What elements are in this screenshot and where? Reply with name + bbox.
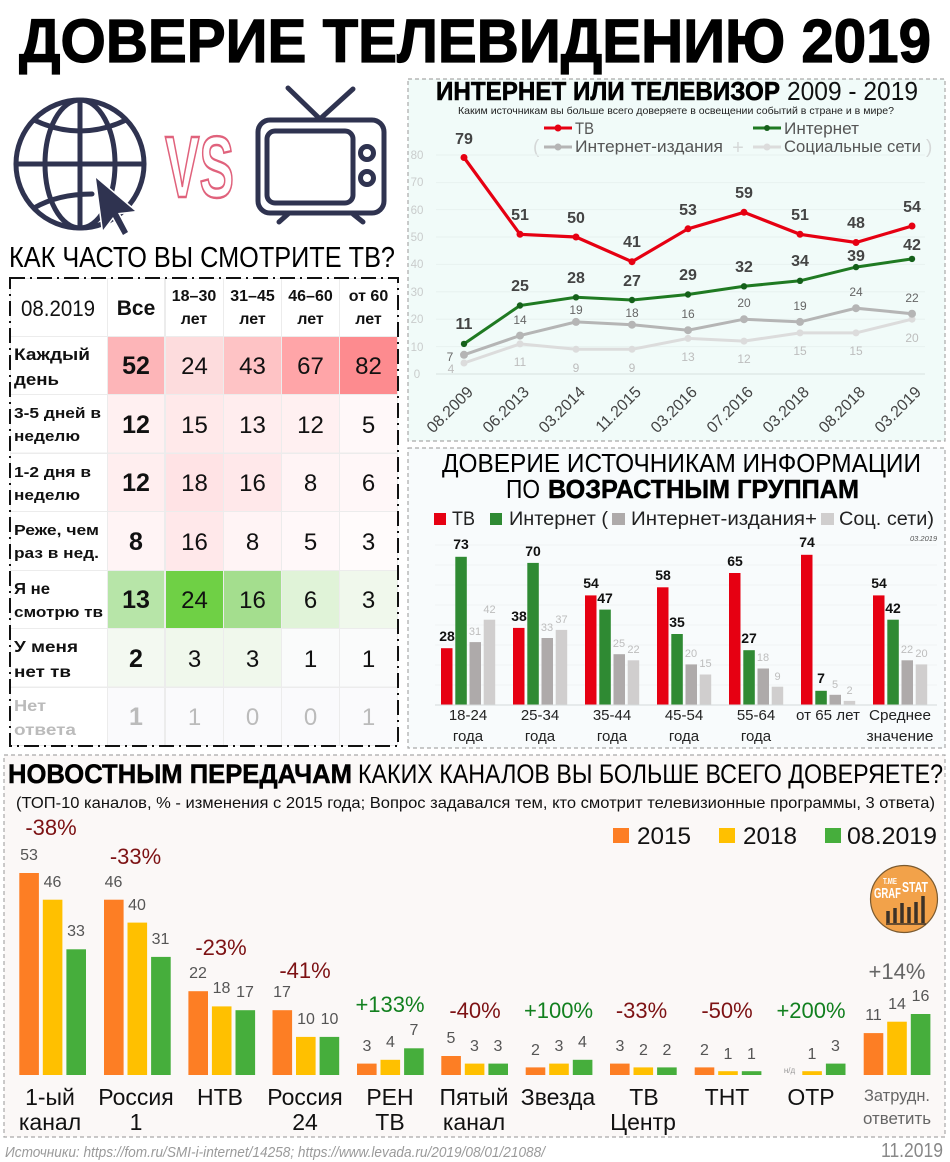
channels subtitle: (ТОП-10 каналов, % - изменения с 2015 года; Вопрос задавался тем, кто смотрит телевизионные программы, 3 ответа) (16, 795, 935, 812)
channels legend: 08.2019 (847, 823, 937, 850)
panel: internet or tv line chart (408, 76, 945, 441)
row: do not watch: 24 (181, 587, 208, 614)
y axis labels: 20 (411, 314, 423, 326)
channel: zvezda: Звезда (521, 1084, 595, 1110)
x axis dates: 03.2016 (648, 384, 701, 437)
group: 65 and over: 5 (832, 679, 838, 691)
row: no tv: У меня (14, 639, 78, 656)
channel: first channel: 53 (20, 847, 38, 864)
line chart heading: Каким источникам вы больше всего доверяете в освещении событий в стране и в мире? (458, 105, 894, 117)
logo: t.me grafstat (870, 866, 938, 932)
channel: otr: 3 (831, 1038, 840, 1055)
group: 18-24: 18-24 (449, 707, 487, 724)
y axis labels: 70 (411, 177, 423, 189)
channel: first channel: 1-ый (25, 1084, 75, 1110)
row: no answer: Нет (14, 698, 46, 715)
channel: first channel: 33 (67, 923, 85, 940)
line: television: 51 (791, 207, 809, 224)
channel: ren tv: 7 (410, 1022, 419, 1039)
row: no answer (14, 698, 375, 739)
row: no tv (14, 639, 375, 681)
group: 55-64: 27 (741, 630, 757, 646)
line: television: 54 (903, 199, 921, 216)
row: 1-2 days: 16 (239, 470, 266, 497)
heading: how often: КАК ЧАСТО ВЫ СМОТРИТЕ ТВ? (9, 242, 395, 274)
group: 45-54: 45-54 (665, 707, 703, 724)
row: less than weekly: раз в нед. (14, 546, 99, 562)
line: internet publications: 19 (793, 299, 807, 313)
age chart heading (442, 448, 921, 504)
row: less than weekly: 5 (304, 529, 317, 556)
group: 55-64 (727, 553, 783, 745)
group: 45-54: 15 (699, 658, 712, 670)
table header: от 60 (349, 288, 388, 305)
line: social networks: 20 (905, 331, 919, 345)
row: no tv: 2 (129, 645, 143, 673)
channel: ren tv: 4 (386, 1034, 395, 1051)
line: internet: 32 (735, 259, 753, 276)
row: every day: день (14, 371, 59, 389)
channel: ntv (188, 935, 255, 1110)
channel: fifth channel: 5 (447, 1030, 456, 1047)
channel: ren tv: 3 (363, 1038, 372, 1055)
channel: hard to answer: 11 (865, 1007, 882, 1024)
line chart legend: Интернет (784, 119, 859, 138)
line: internet: 29 (679, 267, 697, 284)
group: average: 42 (885, 600, 901, 616)
row: 1-2 days: 1-2 дня в (14, 465, 91, 481)
line: internet: 34 (791, 253, 809, 270)
line chart heading: ИНТЕРНЕТ ИЛИ ТЕЛЕВИЗОР (436, 76, 780, 106)
line: television: 41 (623, 234, 641, 251)
panel: trust by age group (408, 448, 945, 748)
channel: tnt: 1 (747, 1046, 756, 1063)
line: social networks: 15 (793, 344, 807, 358)
group: 18-24 (439, 536, 496, 745)
group: 55-64: 65 (727, 553, 743, 569)
channel: zvezda: 3 (555, 1038, 564, 1055)
channels legend: 2015 (637, 823, 691, 850)
icon: television (258, 88, 384, 222)
group: 65 and over: 7 (817, 670, 825, 686)
x axis dates: 03.2018 (760, 384, 813, 437)
age chart heading: ПО (506, 474, 540, 504)
channel: ren tv: +133% (355, 992, 425, 1017)
channel: first channel: канал (19, 1109, 81, 1135)
line: internet publications: 14 (513, 313, 527, 327)
channel: otr: н/д (784, 1066, 795, 1075)
channel: russia 24: -41% (279, 958, 331, 983)
line: internet: 27 (623, 273, 641, 290)
table header (21, 288, 388, 328)
row: do not watch: 16 (239, 587, 266, 614)
y axis labels: 10 (411, 342, 423, 354)
channel: first channel: 46 (44, 874, 62, 891)
channel: tv centre: 2 (639, 1042, 648, 1059)
line: internet: 11 (456, 316, 473, 333)
channel: ntv: -23% (195, 935, 247, 960)
group: 35-44: 54 (583, 575, 599, 591)
table header: 31–45 (230, 288, 275, 305)
line chart legend: ( (533, 137, 540, 158)
group: 35-44: 35-44 (593, 707, 631, 724)
panel: news channels trust (4, 755, 945, 1137)
group: average: 20 (915, 648, 928, 660)
date stamp: 11.2019 (881, 1140, 943, 1162)
line chart legend: ТВ (575, 119, 594, 138)
group: 25-34: 25-34 (521, 707, 559, 724)
row: 3-5 days: 12 (297, 412, 324, 439)
group: 45-54: 58 (655, 567, 671, 583)
channel: tnt: 1 (724, 1046, 733, 1063)
group: 65 and over: 2 (846, 685, 853, 697)
line chart legend: Социальные сети (784, 137, 921, 156)
logo: t.me grafstat: STAT (902, 879, 928, 896)
channel: zvezda (521, 998, 595, 1110)
channel: otr: ОТР (787, 1084, 835, 1110)
row: no answer: 1 (188, 704, 201, 731)
row: 3-5 days: 12 (122, 411, 150, 439)
row: every day: 43 (239, 353, 266, 380)
channel: russia 1: 31 (152, 931, 170, 948)
line: social networks: 12 (737, 352, 751, 366)
table header: 08.2019 (21, 296, 95, 321)
line: social networks: 4 (448, 362, 455, 376)
row: every day: 52 (122, 352, 150, 380)
channel: ren tv: РЕН (366, 1084, 414, 1110)
channel: tnt (695, 998, 761, 1110)
channel: russia 24 (267, 958, 343, 1135)
group: 65 and over (796, 534, 860, 724)
x axis dates: 06.2013 (480, 384, 533, 437)
row: 3-5 days: 15 (181, 412, 208, 439)
channel: russia 24: 10 (297, 1011, 315, 1028)
line chart heading (436, 76, 918, 117)
channel: ntv: 22 (189, 965, 207, 982)
group: 45-54: 35 (669, 614, 685, 630)
channel: first channel (19, 815, 86, 1135)
group: 18-24: 31 (469, 626, 481, 638)
channel: first channel: -38% (25, 815, 77, 840)
x axis dates: 08.2009 (424, 384, 477, 437)
channel: russia 24: 24 (292, 1109, 318, 1135)
channel: hard to answer: Затрудн. (864, 1086, 930, 1105)
row: 3-5 days: неделю (14, 429, 80, 445)
line: social networks: 9 (573, 361, 580, 375)
sources footer: Источники: https://fom.ru/SMI-i-internet/14258; https://www.levada.ru/2019/08/01/21088/ (5, 1145, 547, 1161)
age chart legend: ТВ (452, 509, 475, 530)
group: 25-34: 70 (525, 543, 541, 559)
y axis labels: 40 (411, 259, 423, 271)
group: average: 54 (871, 575, 887, 591)
channels heading: НОВОСТНЫМ ПЕРЕДАЧАМ (8, 759, 352, 789)
group: 55-64: года (741, 728, 772, 745)
group: 25-34: 37 (555, 614, 568, 626)
channel: russia 1: 1 (130, 1109, 142, 1135)
channel: russia 1: Россия (98, 1084, 174, 1110)
row: less than weekly: 16 (181, 529, 208, 556)
line: internet publications: 24 (849, 285, 863, 299)
group: average: Среднее (869, 707, 931, 724)
row: no tv: 3 (246, 646, 259, 673)
group: 18-24: 42 (483, 604, 496, 616)
table header: 46–60 (288, 288, 333, 305)
group: 65 and over: 74 (799, 534, 815, 550)
survey date: 03.2019 (910, 534, 938, 543)
table: viewing frequency (10, 278, 398, 746)
channel: tnt: ТНТ (705, 1084, 749, 1110)
age chart legend: Интернет ( (509, 509, 609, 530)
line: internet: 42 (903, 237, 921, 254)
group: 35-44: 22 (627, 644, 640, 656)
channel: russia 24: Россия (267, 1084, 343, 1110)
channel: hard to answer: ответить (863, 1109, 931, 1128)
line: television: 59 (735, 185, 753, 202)
row: no answer: ответа (14, 722, 76, 739)
row: 1-2 days: 8 (304, 470, 317, 497)
row: no answer: 1 (362, 704, 375, 731)
group: average: 22 (901, 644, 913, 656)
channel: fifth channel: -40% (449, 998, 501, 1023)
row: 1-2 days: неделю (14, 488, 80, 504)
row: do not watch: 13 (122, 586, 150, 614)
x axis dates: 03.2014 (536, 384, 589, 437)
channel: tv centre: -33% (616, 998, 667, 1023)
row: less than weekly: 3 (362, 529, 375, 556)
line: social networks (448, 316, 919, 376)
channels legend (613, 823, 937, 850)
line: internet (456, 237, 921, 347)
line: television (455, 131, 921, 265)
channel: russia 1: 40 (128, 897, 146, 914)
logo: t.me grafstat: GRAF (874, 885, 901, 902)
row: every day: 67 (297, 353, 324, 380)
line: social networks: 9 (629, 361, 636, 375)
line: internet publications (447, 285, 919, 364)
y axis labels (411, 150, 423, 381)
group: 55-64: 55-64 (737, 707, 775, 724)
channel: hard to answer: 14 (888, 996, 906, 1013)
icon: VS: VS (165, 119, 234, 216)
channel: fifth channel (440, 998, 508, 1135)
line: social networks: 11 (514, 355, 527, 369)
row: 3-5 days: 3-5 дней в (14, 406, 101, 422)
icon: globe with cursor (16, 100, 144, 235)
group: 18-24: года (453, 728, 484, 745)
y axis labels: 0 (414, 369, 420, 381)
table header: 18–30 (172, 288, 216, 305)
line: internet publications: 7 (447, 350, 454, 364)
line: television: 48 (847, 215, 865, 232)
x axis dates: 11.2015 (593, 384, 645, 436)
channel: fifth channel: канал (443, 1109, 505, 1135)
group: average (866, 575, 934, 745)
age chart legend: Интернет-издания+ (631, 509, 817, 530)
group: 18-24: 28 (439, 628, 455, 644)
line chart legend (533, 119, 932, 159)
row: 1-2 days (14, 465, 375, 504)
group: average: значение (866, 728, 934, 745)
y axis labels: 80 (411, 150, 423, 162)
row: no tv: 3 (188, 646, 201, 673)
group: 35-44: 47 (597, 590, 613, 606)
line: television: 79 (455, 131, 473, 148)
row: 3-5 days: 5 (362, 412, 375, 439)
x axis dates: 08.2018 (816, 384, 869, 437)
group: 65 and over: от 65 лет (796, 707, 860, 724)
row: no answer: 1 (129, 703, 143, 731)
row: every day: 82 (355, 353, 382, 380)
line: internet: 25 (511, 278, 529, 295)
channels heading (8, 759, 943, 789)
channel: fifth channel: Пятый (440, 1084, 508, 1110)
channel: hard to answer: 16 (912, 988, 930, 1005)
channel: tv centre: 2 (663, 1042, 672, 1059)
channel: russia 1: 46 (105, 874, 122, 891)
channel: hard to answer (863, 959, 931, 1128)
row: less than weekly: 8 (129, 528, 143, 556)
group: 45-54: 20 (685, 648, 697, 660)
channel: russia 1: -33% (110, 844, 161, 869)
row: do not watch: 3 (362, 587, 375, 614)
line chart legend: ) (926, 137, 932, 158)
channel: hard to answer: +14% (869, 959, 925, 984)
table header: лет (355, 311, 382, 328)
channel: fifth channel: 3 (494, 1038, 503, 1055)
age chart heading: ВОЗРАСТНЫМ ГРУППАМ (548, 474, 859, 504)
channel: tnt: 2 (700, 1042, 709, 1059)
row: do not watch: Я не (14, 581, 50, 598)
channel: fifth channel: 3 (470, 1038, 479, 1055)
channel: ntv: НТВ (197, 1084, 243, 1110)
line: internet: 39 (847, 248, 865, 265)
row: 1-2 days: 6 (362, 470, 375, 497)
y axis labels: 30 (411, 287, 423, 299)
row: no tv: 1 (362, 646, 375, 673)
row: less than weekly: 8 (246, 529, 259, 556)
line: television: 53 (679, 202, 697, 219)
channels legend: 2018 (743, 823, 797, 850)
channel: tv centre: 3 (616, 1038, 625, 1055)
row: less than weekly (14, 523, 375, 562)
table header: лет (181, 311, 207, 328)
x axis dates (424, 384, 925, 437)
y axis labels: 60 (411, 205, 423, 217)
channel: zvezda: 4 (578, 1034, 587, 1051)
line: internet publications: 19 (569, 303, 583, 317)
row: 1-2 days: 18 (181, 470, 208, 497)
line chart legend: Интернет-издания (575, 137, 723, 156)
line: television: 51 (511, 207, 529, 224)
line chart heading: 2009 - 2019 (787, 76, 918, 106)
x axis dates: 07.2016 (704, 384, 757, 437)
row: every day (14, 346, 382, 389)
row: less than weekly: Реже, чем (14, 523, 99, 539)
row: no answer: 0 (246, 704, 259, 731)
channel: tv centre: Центр (610, 1109, 676, 1135)
age chart legend (434, 509, 934, 530)
group: 45-54: года (669, 728, 700, 745)
row: 3-5 days (14, 406, 375, 445)
line: internet publications: 22 (905, 291, 919, 305)
channel: ntv: 17 (236, 984, 254, 1001)
row: every day: Каждый (14, 346, 90, 364)
line: television: 50 (567, 210, 585, 227)
channel: russia 24: 17 (273, 984, 291, 1001)
group: 25-34 (511, 543, 568, 745)
group: 25-34: 38 (511, 608, 527, 624)
channel: otr (776, 998, 846, 1110)
line: internet publications: 20 (737, 296, 751, 310)
row: every day: 24 (181, 353, 208, 380)
channel: ntv: 18 (213, 980, 230, 997)
row: do not watch: 6 (304, 587, 317, 614)
group: 18-24: 73 (453, 536, 469, 552)
x axis dates: 03.2019 (872, 384, 925, 437)
age chart heading: ДОВЕРИЕ ИСТОЧНИКАМ ИНФОРМАЦИИ (442, 448, 921, 478)
table header: Все (117, 297, 155, 320)
row: no answer: 0 (304, 704, 317, 731)
line: internet: 28 (567, 270, 585, 287)
channel: russia 1 (98, 844, 174, 1135)
group: 55-64: 18 (757, 652, 769, 664)
channel: zvezda: 2 (531, 1042, 540, 1059)
group: 35-44: 25 (613, 638, 625, 650)
row: no tv: нет тв (14, 664, 71, 681)
channel: ren tv: ТВ (375, 1109, 405, 1135)
channel: russia 24: 10 (321, 1011, 338, 1028)
channel: tv centre (610, 998, 677, 1135)
y axis labels: 50 (411, 232, 423, 244)
group: 35-44 (583, 575, 640, 745)
channel: otr: 1 (808, 1046, 817, 1063)
group: 25-34: 33 (541, 622, 553, 634)
logo: t.me grafstat: T.ME (883, 877, 898, 886)
line: internet publications: 18 (625, 306, 639, 320)
channel: otr: +200% (776, 998, 846, 1023)
channel: zvezda: +100% (524, 998, 593, 1023)
row: do not watch (14, 581, 375, 621)
title: ДОВЕРИЕ ТЕЛЕВИДЕНИЮ 2019 (19, 7, 931, 75)
group: 25-34: года (525, 728, 556, 745)
channel: tv centre: ТВ (629, 1084, 659, 1110)
table header: лет (239, 311, 266, 328)
line: internet publications: 16 (681, 307, 695, 321)
group: 45-54 (655, 567, 712, 745)
row: 3-5 days: 13 (239, 412, 266, 439)
line chart legend: + (732, 137, 744, 159)
table header: лет (297, 311, 324, 328)
line: social networks: 15 (849, 344, 863, 358)
line: social networks: 13 (681, 350, 695, 364)
channel: tnt: -50% (701, 998, 753, 1023)
channel: ren tv (355, 992, 425, 1135)
age chart legend: Соц. сети) (839, 509, 934, 530)
row: do not watch: смотрю тв (14, 605, 103, 621)
group: 55-64: 9 (774, 671, 781, 683)
row: no tv: 1 (304, 646, 317, 673)
row: 1-2 days: 12 (122, 469, 150, 497)
group: 35-44: года (597, 728, 628, 745)
